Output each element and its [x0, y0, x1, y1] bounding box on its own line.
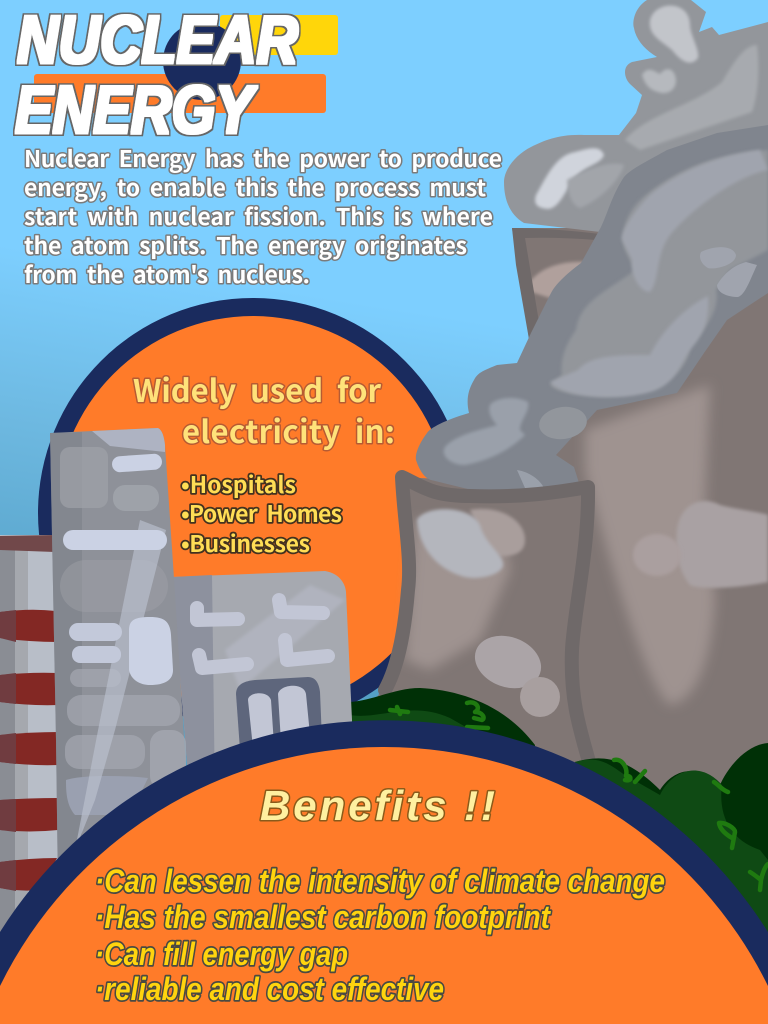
panel: benefits circle	[0, 720, 768, 1024]
front cooling tower body	[375, 477, 600, 780]
list: electricity uses: •Hospitals	[181, 466, 296, 500]
office building right block	[172, 571, 352, 800]
striped building	[0, 535, 60, 935]
panel: widely used circle	[38, 298, 468, 728]
vines	[390, 702, 768, 890]
lighter smoke interior	[550, 150, 768, 396]
title: ENERGY	[15, 72, 258, 148]
smoke plume	[416, 0, 768, 493]
intro text block: Nuclear Energy has the power to produce	[24, 140, 502, 174]
list: electricity uses	[181, 466, 342, 559]
heading: widely used: electricity in:	[182, 407, 395, 452]
list: electricity uses: •Businesses	[181, 525, 310, 559]
intro text block: from the atom's nucleus.	[24, 256, 310, 290]
heading: benefits: Benefits !!	[260, 782, 495, 829]
lower smoke band	[416, 125, 768, 493]
heading: widely used	[133, 366, 395, 452]
list: benefits: ·Can fill energy gap	[95, 936, 348, 972]
title: NUCLEAR	[17, 2, 298, 78]
intro text block	[24, 140, 502, 290]
upper smoke cloud	[504, 0, 768, 232]
list: benefits: ·Has the smallest carbon footprint	[95, 899, 551, 935]
list: electricity uses: •Power Homes	[181, 495, 342, 529]
intro text block: the atom splits. The energy originates	[24, 227, 467, 261]
title	[15, 2, 298, 148]
list: benefits: ·Can lessen the intensity of climate change	[95, 863, 665, 899]
green hills and vines	[350, 688, 768, 960]
doorway	[236, 677, 322, 750]
intro text block: start with nuclear fission. This is where	[24, 198, 493, 232]
title backdrop shapes	[34, 15, 338, 113]
office building tall tower	[50, 428, 188, 890]
heading: widely used: Widely used for	[133, 366, 381, 411]
back cooling tower	[512, 120, 768, 830]
list: benefits	[95, 863, 665, 1007]
front tower rim	[385, 477, 590, 765]
list: benefits: ·reliable and cost effective	[95, 971, 444, 1007]
intro text block: energy, to enable this the process must	[24, 169, 486, 203]
